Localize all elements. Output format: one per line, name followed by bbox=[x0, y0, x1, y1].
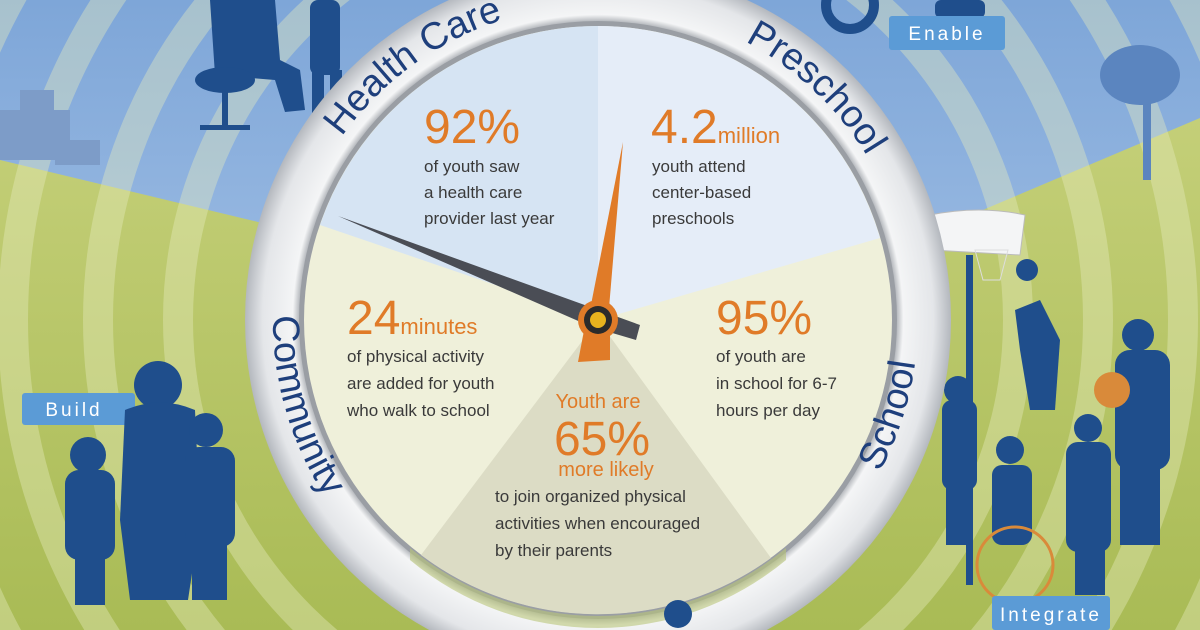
needle: orange bbox=[592, 142, 623, 304]
stat: home bbox=[495, 391, 700, 560]
icon: family bbox=[65, 361, 235, 605]
label: Integrate: Integrate bbox=[1000, 605, 1102, 626]
sector: health care bbox=[320, 26, 598, 320]
stat: preschool: preschools bbox=[652, 209, 734, 228]
stat: home: more likely bbox=[558, 459, 654, 481]
stat: health care: provider last year bbox=[424, 209, 555, 228]
stat: home: Youth are bbox=[556, 391, 640, 413]
stat: school: of youth are bbox=[716, 347, 806, 366]
label: Build: Build bbox=[45, 400, 103, 421]
icon: health care figures bbox=[195, 0, 342, 130]
icon: school kids bbox=[942, 300, 1170, 603]
stat: preschool bbox=[651, 101, 780, 228]
stat: home: 65% bbox=[554, 413, 650, 466]
needle base bbox=[578, 334, 610, 362]
icon: tree bbox=[1100, 45, 1180, 180]
clock face sectors bbox=[304, 26, 892, 628]
stat: home: activities when encouraged bbox=[495, 514, 700, 533]
stat: preschool: 4.2million bbox=[651, 101, 780, 154]
icon: enable figures bbox=[826, 0, 985, 29]
icon: home figure bbox=[664, 600, 692, 628]
sector: preschool bbox=[598, 26, 880, 320]
icon: basketball hoop bbox=[930, 210, 1038, 585]
label: Enable: Enable bbox=[908, 24, 986, 45]
stat: school: in school for 6-7 bbox=[716, 374, 837, 393]
stat: school: 95% bbox=[716, 292, 812, 345]
stat: preschool: youth attend bbox=[652, 157, 746, 176]
stat: school bbox=[716, 292, 837, 420]
stat: community: of physical activity bbox=[347, 347, 484, 366]
icon: buildings bbox=[0, 90, 100, 165]
stat: community: 24minutes bbox=[347, 292, 477, 345]
clock ring bbox=[245, 0, 951, 630]
stat: health care: 92% bbox=[424, 101, 520, 154]
label: Enable bbox=[889, 16, 1005, 50]
stat: community: are added for youth bbox=[347, 374, 494, 393]
label: Build bbox=[22, 393, 135, 425]
stat: home: by their parents bbox=[495, 541, 612, 560]
hub bbox=[578, 301, 618, 336]
ring label: Preschool: Preschool bbox=[748, 20, 889, 154]
stat: health care bbox=[424, 101, 555, 228]
background sky bbox=[0, 0, 1200, 222]
stat: school: hours per day bbox=[716, 401, 820, 420]
ring label: Community: Community bbox=[272, 317, 343, 492]
label: Integrate bbox=[992, 596, 1110, 630]
ring label: School: School bbox=[860, 360, 915, 468]
stat: preschool: center-based bbox=[652, 183, 751, 202]
stat: home: to join organized physical bbox=[495, 487, 686, 506]
stat: health care: of youth saw bbox=[424, 157, 520, 176]
stat: community bbox=[347, 300, 494, 416]
stat: community: who walk to school bbox=[346, 401, 490, 420]
needle: grey bbox=[338, 216, 640, 340]
sector: home bbox=[421, 320, 771, 614]
stat: health care: a health care bbox=[424, 183, 522, 202]
